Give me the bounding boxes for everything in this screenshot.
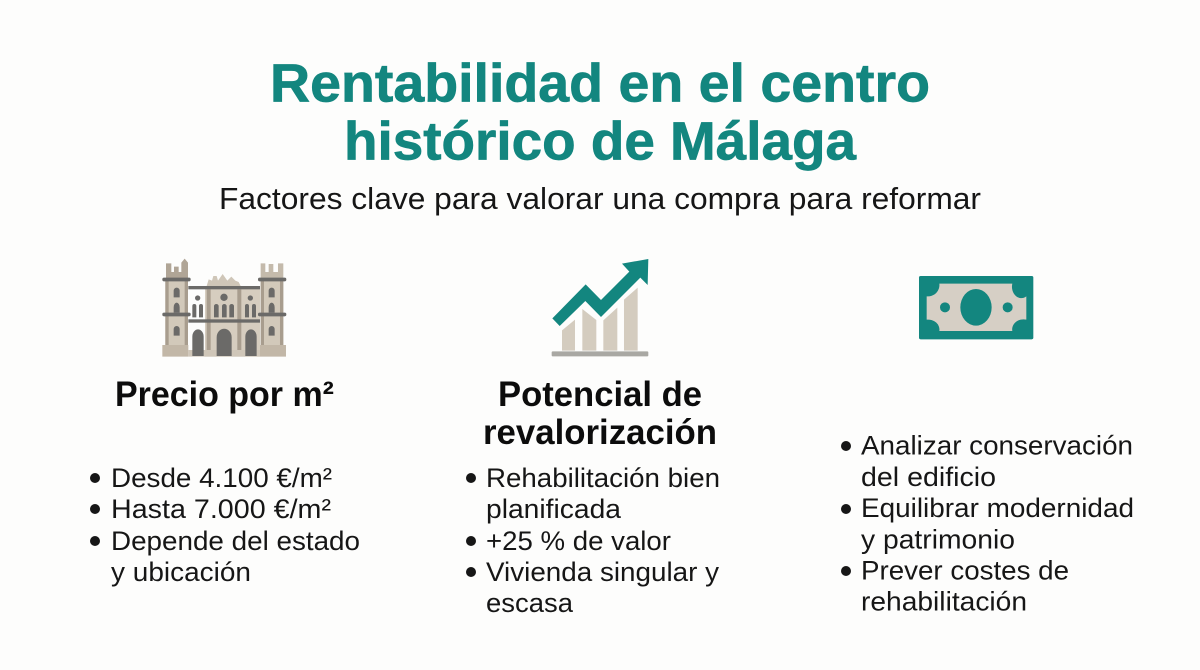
panel: precio por m2 (90, 259, 360, 587)
title: Rentabilidad en el centro (270, 54, 930, 114)
bullet list: potencial: Vivienda singular y (486, 557, 720, 587)
icon: banknote (919, 276, 1033, 339)
heading: potencial de revalorizacion: revalorización (483, 413, 717, 452)
bullet list: potencial: +25 % de valor (486, 526, 671, 556)
bullet list: precio: Depende del estado (111, 526, 360, 556)
bullet list: reforma: y patrimonio (861, 524, 1015, 554)
panel: reforma (841, 276, 1134, 616)
bullet list: potencial (466, 463, 720, 618)
panel: potencial de revalorizacion (466, 259, 720, 618)
bullet list: precio: y ubicación (111, 557, 251, 587)
bullet list: reforma: Analizar conservación (861, 430, 1133, 460)
bullet list: reforma: rehabilitación (861, 586, 1027, 616)
bullet list: reforma: Equilibrar modernidad (861, 493, 1134, 523)
bullet list: potencial: planificada (486, 494, 622, 524)
heading: potencial de revalorizacion (483, 375, 717, 452)
bullet list: reforma: del edificio (861, 462, 996, 492)
icon: cathedral (162, 259, 286, 357)
bullet list: potencial: escasa (486, 588, 574, 618)
bullet list: precio (90, 463, 360, 587)
bullet list: reforma: Prever costes de (861, 556, 1069, 586)
title: histórico de Málaga (344, 112, 857, 172)
bullet list: precio: Desde 4.100 €/m² (111, 463, 332, 493)
bullet list: reforma (841, 430, 1134, 616)
title (270, 54, 930, 172)
heading: potencial de revalorizacion: Potencial de (498, 375, 702, 414)
icon: rising chart (552, 259, 648, 356)
subtitle: Factores clave para valorar una compra para reformar (219, 181, 981, 216)
heading: precio por m2: Precio por m² (115, 375, 334, 414)
bullet list: precio: Hasta 7.000 €/m² (111, 494, 331, 524)
bullet list: potencial: Rehabilitación bien (486, 463, 720, 493)
